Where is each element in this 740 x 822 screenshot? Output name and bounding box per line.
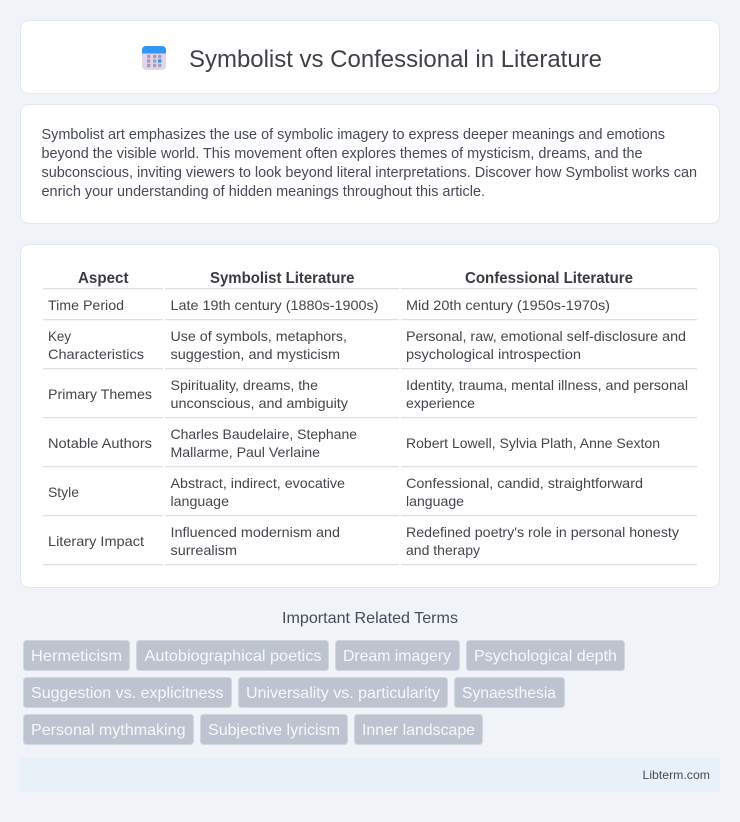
table rules <box>43 288 697 565</box>
row: key characteristics: suggestion, and mysticism <box>170 346 340 362</box>
table header row: Confessional Literature <box>465 270 633 287</box>
row: key characteristics: Characteristics <box>48 346 144 362</box>
tag: Psychological depth <box>466 640 624 670</box>
panel: comparison table <box>20 244 720 588</box>
tag: Universality vs. particularity <box>238 678 448 708</box>
panel: introduction <box>20 104 720 224</box>
tag: Universality vs. particularity: Universality vs. particularity <box>246 685 440 702</box>
table header row: Symbolist Literature <box>210 270 355 287</box>
row: time period <box>48 297 610 313</box>
row: notable authors <box>48 426 660 460</box>
row: literary impact: Literary Impact <box>48 533 144 549</box>
title: Symbolist vs Confessional in Literature <box>189 46 602 73</box>
row: time period: Late 19th century (1880s-1900s) <box>170 297 378 313</box>
row: notable authors: Mallarme, Paul Verlaine <box>170 444 320 460</box>
row: literary impact <box>48 524 679 558</box>
row: style <box>48 475 643 509</box>
row: notable authors: Robert Lowell, Sylvia Plath, Anne Sexton <box>406 435 660 451</box>
row: style: Abstract, indirect, evocative <box>170 475 345 491</box>
row: key characteristics: Key <box>48 328 71 344</box>
tag: Synaesthesia: Synaesthesia <box>462 685 556 702</box>
row: style: language <box>406 493 464 509</box>
tag: Hermeticism: Hermeticism <box>31 648 122 665</box>
tag: Autobiographical poetics <box>136 640 328 670</box>
row: primary themes: Identity, trauma, mental illness, and personal <box>406 377 688 393</box>
row: key characteristics <box>48 328 686 362</box>
row: notable authors: Notable Authors <box>48 435 152 451</box>
row: primary themes: unconscious, and ambiguity <box>170 395 348 411</box>
row: notable authors: Charles Baudelaire, Stephane <box>170 426 357 442</box>
tag: Suggestion vs. explicitness: Suggestion vs. explicitness <box>31 685 224 702</box>
row: key characteristics: psychological introspection <box>406 346 581 362</box>
intro paragraph: subconscious, inviting viewers to look beyond literal interpretations. Discover how Symbolist works can <box>42 165 697 181</box>
row: time period: Mid 20th century (1950s-1970s) <box>406 297 610 313</box>
tag: Subjective lyricism <box>200 714 348 744</box>
panel: related term tags <box>24 640 624 744</box>
row: time period: Time Period <box>48 297 124 313</box>
tag: Suggestion vs. explicitness <box>24 678 232 708</box>
row: literary impact: surrealism <box>170 542 237 558</box>
row: primary themes: Spirituality, dreams, the <box>170 377 318 393</box>
intro paragraph <box>42 127 697 200</box>
row: primary themes: Primary Themes <box>48 386 152 402</box>
row: literary impact: Redefined poetry's role in personal honesty <box>406 524 679 540</box>
tag: Dream imagery: Dream imagery <box>343 648 451 665</box>
row: primary themes <box>48 377 688 411</box>
icon: calendar <box>142 46 166 70</box>
intro paragraph: enrich your understanding of hidden meanings throughout this article. <box>42 184 485 200</box>
table header row: Aspect <box>78 270 128 287</box>
tag: Psychological depth: Psychological depth <box>474 648 617 665</box>
row: style: Confessional, candid, straightforward <box>406 475 643 491</box>
row: literary impact: and therapy <box>406 542 480 558</box>
tag: Subjective lyricism: Subjective lyricism <box>208 722 340 739</box>
row: style: language <box>170 493 229 509</box>
tag: Synaesthesia <box>454 678 564 708</box>
row: primary themes: experience <box>406 395 475 411</box>
footer credit: Libterm.com <box>642 768 710 782</box>
tag: Inner landscape <box>354 714 482 744</box>
row: key characteristics: Use of symbols, metaphors, <box>170 328 347 344</box>
tag: Autobiographical poetics: Autobiographical poetics <box>144 648 322 665</box>
row: literary impact: Influenced modernism and <box>170 524 340 540</box>
tag: Personal mythmaking <box>24 714 194 744</box>
tag: Personal mythmaking: Personal mythmaking <box>31 722 186 739</box>
row: key characteristics: Personal, raw, emotional self-disclosure and <box>406 328 686 344</box>
header panel <box>20 20 720 94</box>
table header row <box>78 270 633 287</box>
tag: Hermeticism <box>24 640 130 670</box>
tag: Inner landscape: Inner landscape <box>362 722 475 739</box>
heading: important related terms: Important Related Terms <box>282 610 458 627</box>
intro paragraph: beyond the visible world. This movement often explores themes of mysticism, dreams, and the <box>42 146 642 162</box>
tag: Dream imagery <box>336 640 460 670</box>
intro paragraph: Symbolist art emphasizes the use of symbolic imagery to express deeper meanings and emotions <box>42 127 665 143</box>
footer <box>20 758 720 792</box>
row: style: Style <box>48 484 79 500</box>
